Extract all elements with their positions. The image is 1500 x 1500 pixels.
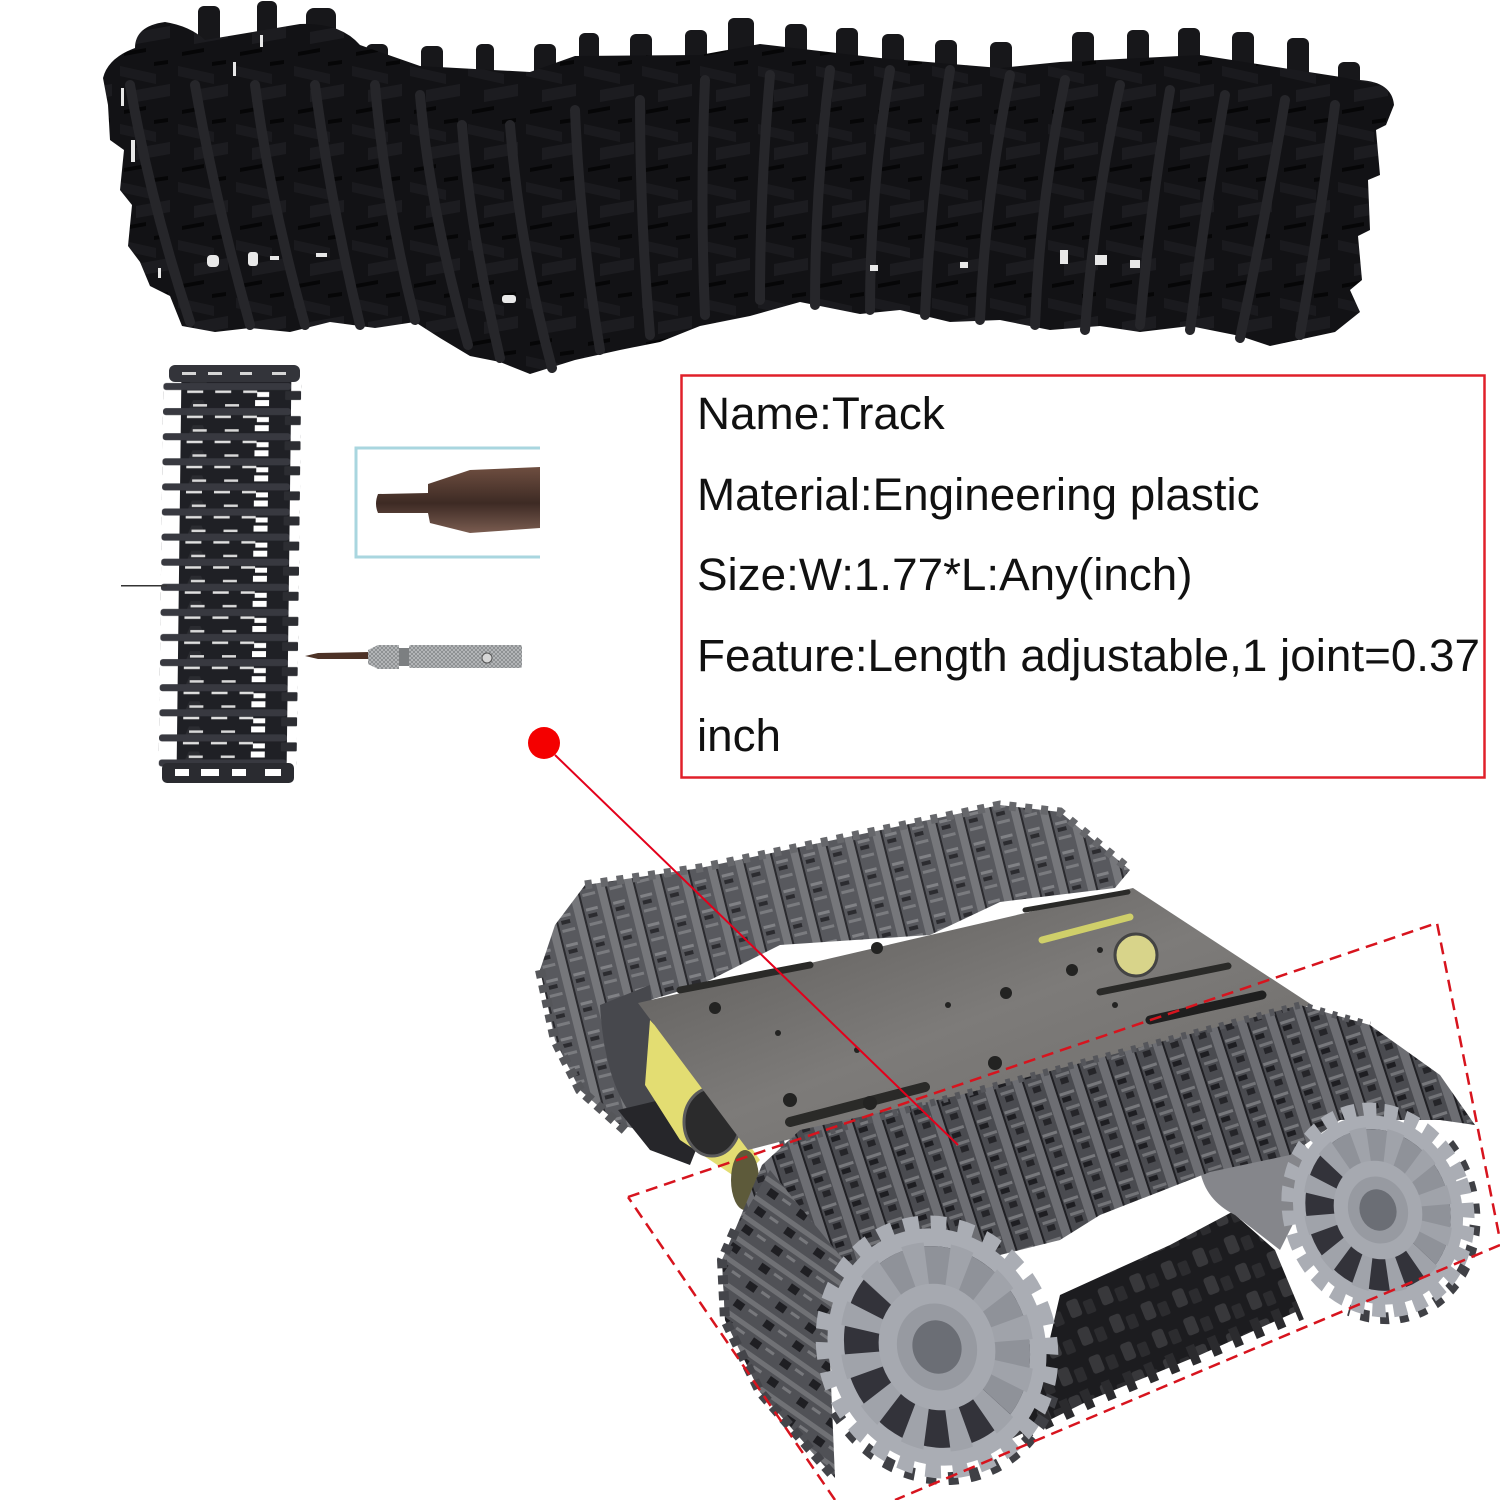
motor yellow body <box>645 1020 760 1180</box>
far wheel track knobs <box>1307 1142 1500 1334</box>
specification text: Feature:Length adjustable,1 joint=0.37 <box>697 630 1480 681</box>
tool knurled collar <box>368 645 399 669</box>
specification text: Material:Engineering plastic <box>697 469 1260 520</box>
specification text: inch <box>697 710 781 761</box>
specification box <box>682 376 1484 778</box>
rear wheel drum <box>600 985 700 1150</box>
needle tip <box>376 467 540 533</box>
rear track dark underside <box>618 1100 700 1165</box>
track links body <box>159 375 301 767</box>
box border <box>682 376 1484 778</box>
front track drum <box>1200 1120 1320 1250</box>
rear track <box>540 805 1130 1130</box>
track vertical ribs <box>130 70 1335 368</box>
specification text: Size:W:1.77*L:Any(inch) <box>697 549 1193 600</box>
dashed outline around track <box>628 923 1500 1500</box>
callout pointer line <box>555 755 958 1145</box>
track bottom cap <box>162 763 294 783</box>
tool handle <box>409 645 522 668</box>
needle close-up inset <box>356 448 540 557</box>
callout red dot <box>528 727 560 759</box>
tracked chassis photo <box>540 805 1500 1500</box>
plate slots <box>680 892 1262 1122</box>
black underside track <box>985 1212 1300 1452</box>
black track photo <box>103 1 1394 374</box>
front track upper surface <box>722 1005 1475 1478</box>
assembled track sample <box>121 365 301 783</box>
track light gaps <box>121 35 1140 303</box>
track top cap <box>169 365 300 382</box>
tool shaft <box>305 652 370 659</box>
specification text: Name:Track <box>697 388 945 439</box>
track teeth row <box>198 1 1360 102</box>
near wheel <box>779 1173 1100 1500</box>
inset frame <box>356 448 540 557</box>
pin tool <box>305 645 522 669</box>
near wheel track knobs <box>834 1337 1069 1500</box>
track body silhouette <box>103 22 1394 374</box>
plate holes <box>709 942 1118 1110</box>
motor wheel spokes <box>684 1088 740 1156</box>
far wheel <box>1256 1071 1500 1343</box>
rear axle gear <box>731 1150 759 1210</box>
specification text <box>697 388 1480 761</box>
metal plate <box>638 888 1312 1150</box>
pin through track <box>121 585 167 586</box>
motor opening <box>1115 934 1157 976</box>
